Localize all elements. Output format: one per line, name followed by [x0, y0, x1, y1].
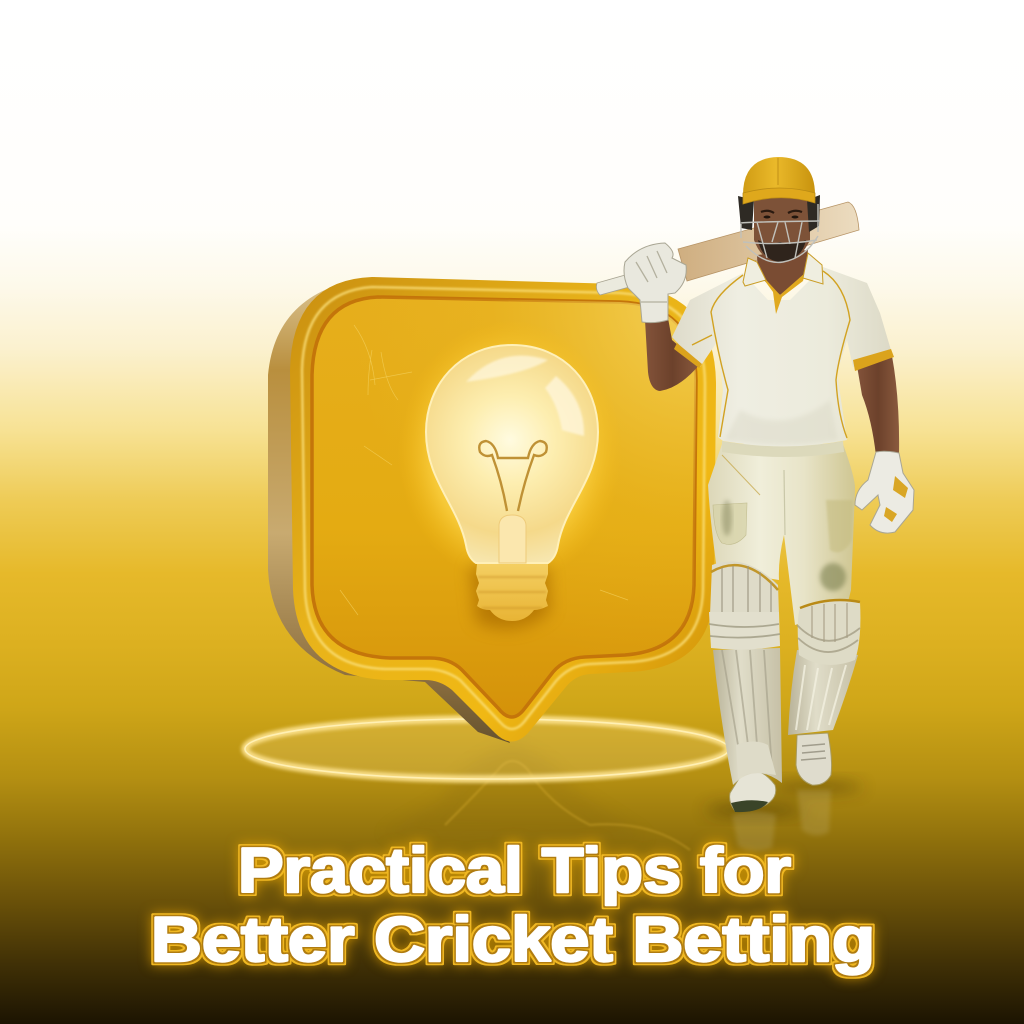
beard [758, 240, 806, 262]
top hand glove [624, 243, 686, 323]
jersey [672, 250, 894, 446]
front batting pad [709, 561, 782, 785]
player reflection [732, 790, 831, 852]
head and helmet [738, 157, 820, 262]
glowing floor ring [245, 719, 729, 779]
sleeve cuff [853, 349, 894, 371]
jersey shading [725, 400, 838, 445]
bottom hand glove [855, 451, 914, 533]
faceguard grill [741, 204, 820, 262]
screw base [476, 564, 548, 621]
helmet side shell [738, 195, 820, 232]
glass globe [426, 345, 598, 563]
floor shadows under player [705, 782, 863, 816]
light bulb [398, 320, 622, 629]
bubble side extrusion [268, 277, 510, 743]
bulb drop shadow [470, 565, 550, 629]
raised arm [645, 318, 700, 391]
bat handle [596, 268, 655, 295]
reflection of speech bubble tip [380, 745, 690, 850]
collar [743, 258, 766, 286]
speech bubble [268, 277, 716, 743]
bat blade [678, 202, 859, 281]
waistband [722, 441, 844, 457]
pocket patches and grass stains [713, 503, 747, 544]
bulb glow halo [398, 320, 622, 584]
cricket player [596, 157, 914, 812]
bubble rim highlight [302, 287, 705, 729]
right arm [857, 356, 899, 456]
cricket bat [596, 202, 859, 295]
helmet brim [743, 188, 815, 204]
filament stem [499, 515, 526, 563]
filament [479, 441, 547, 511]
bubble front rim [290, 277, 716, 742]
helmet dome [743, 157, 815, 195]
face [754, 188, 810, 262]
back shoe [730, 770, 776, 812]
near shoe [796, 733, 832, 785]
eyes [761, 211, 802, 213]
title line 1: Practical Tips for [238, 836, 791, 906]
surface scratches [340, 325, 628, 615]
far batting pad [788, 600, 860, 735]
bubble inner face [312, 297, 696, 717]
neck and open collar [757, 250, 808, 295]
bubble face sheen [312, 297, 696, 717]
knee roll [709, 612, 780, 650]
glass highlights [466, 356, 548, 382]
title line 2: Better Cricket Betting [151, 905, 875, 975]
jersey gold piping [692, 271, 850, 438]
trousers [708, 441, 855, 625]
